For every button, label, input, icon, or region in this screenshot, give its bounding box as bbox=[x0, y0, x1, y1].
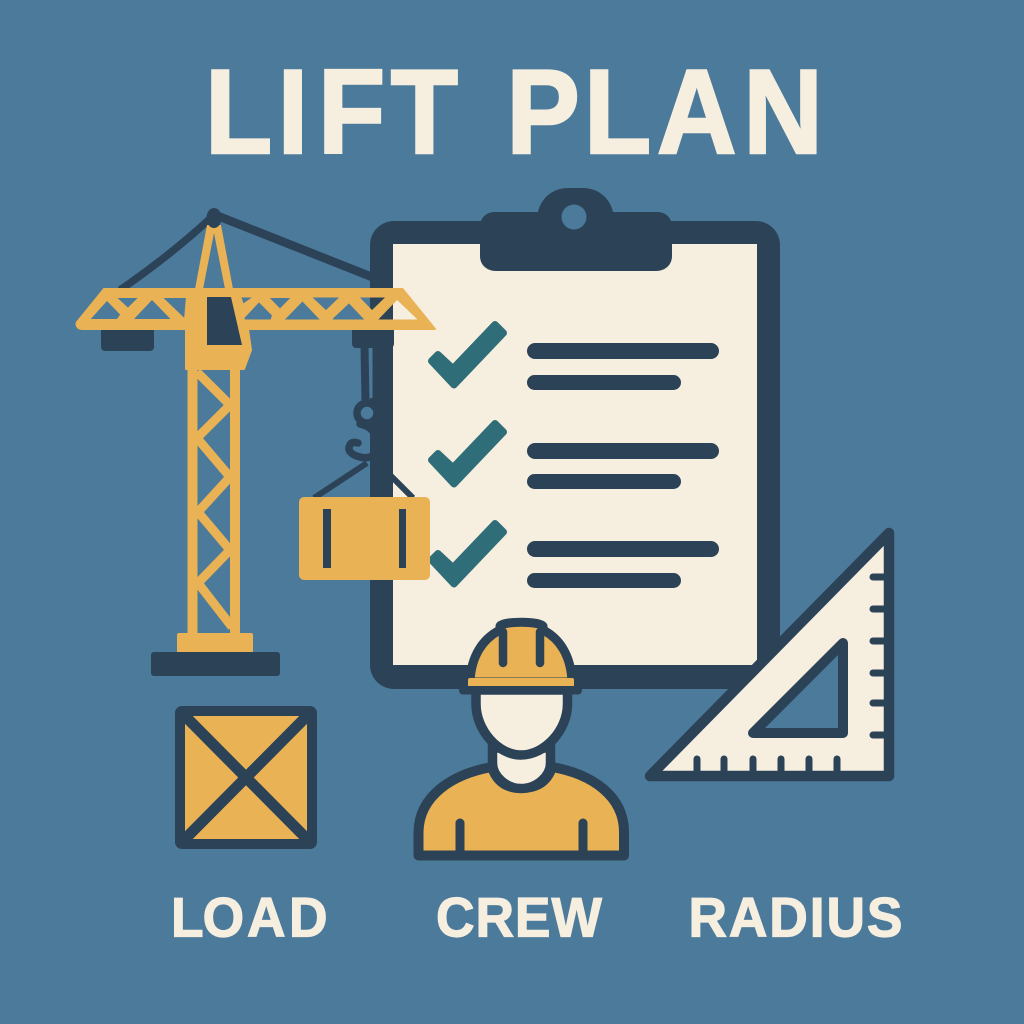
checklist item 2 bbox=[432, 424, 719, 489]
clip hole bbox=[562, 204, 586, 230]
title: LIFT PLAN bbox=[205, 46, 823, 179]
bottom ticks bbox=[697, 759, 837, 772]
worker neck bbox=[492, 748, 550, 788]
icon: worker bbox=[418, 622, 624, 856]
right crane cable bbox=[213, 214, 372, 277]
checklist item 1 bbox=[432, 324, 719, 390]
a-frame bbox=[195, 225, 233, 289]
worker body bbox=[418, 767, 624, 856]
hat ridges bbox=[503, 632, 540, 663]
trolley bbox=[352, 325, 394, 348]
label: radius: RADIUS bbox=[688, 885, 902, 949]
clipboard board bbox=[370, 221, 780, 689]
hook bbox=[349, 403, 377, 458]
hanging load bbox=[299, 497, 430, 580]
clipboard clip bbox=[480, 188, 672, 271]
ground plate bbox=[151, 652, 280, 676]
label: load: LOAD bbox=[171, 885, 328, 949]
side ticks bbox=[873, 577, 885, 735]
set square cutout bbox=[753, 643, 843, 733]
counterweight bbox=[101, 325, 154, 351]
clipboard paper bbox=[393, 244, 757, 665]
hat brim bbox=[468, 678, 574, 687]
left crane cable bbox=[120, 216, 213, 290]
worker face bbox=[476, 690, 568, 755]
jib bbox=[77, 289, 435, 369]
slings bbox=[314, 463, 413, 498]
icon: set square bbox=[650, 533, 889, 776]
operator cab window bbox=[207, 297, 242, 345]
icon: tower crane bbox=[77, 208, 435, 676]
label: crew: CREW bbox=[436, 885, 602, 949]
checklist item 3 bbox=[432, 524, 719, 588]
mast base bbox=[177, 633, 253, 653]
icon: clipboard checklist bbox=[370, 188, 780, 689]
hard hat bbox=[470, 622, 572, 682]
set square body bbox=[650, 533, 889, 776]
icon: load crate bbox=[175, 706, 317, 849]
apex bbox=[206, 208, 222, 228]
arm lines bbox=[460, 823, 583, 851]
hoist cable bbox=[364, 347, 366, 400]
mast bbox=[192, 365, 235, 636]
